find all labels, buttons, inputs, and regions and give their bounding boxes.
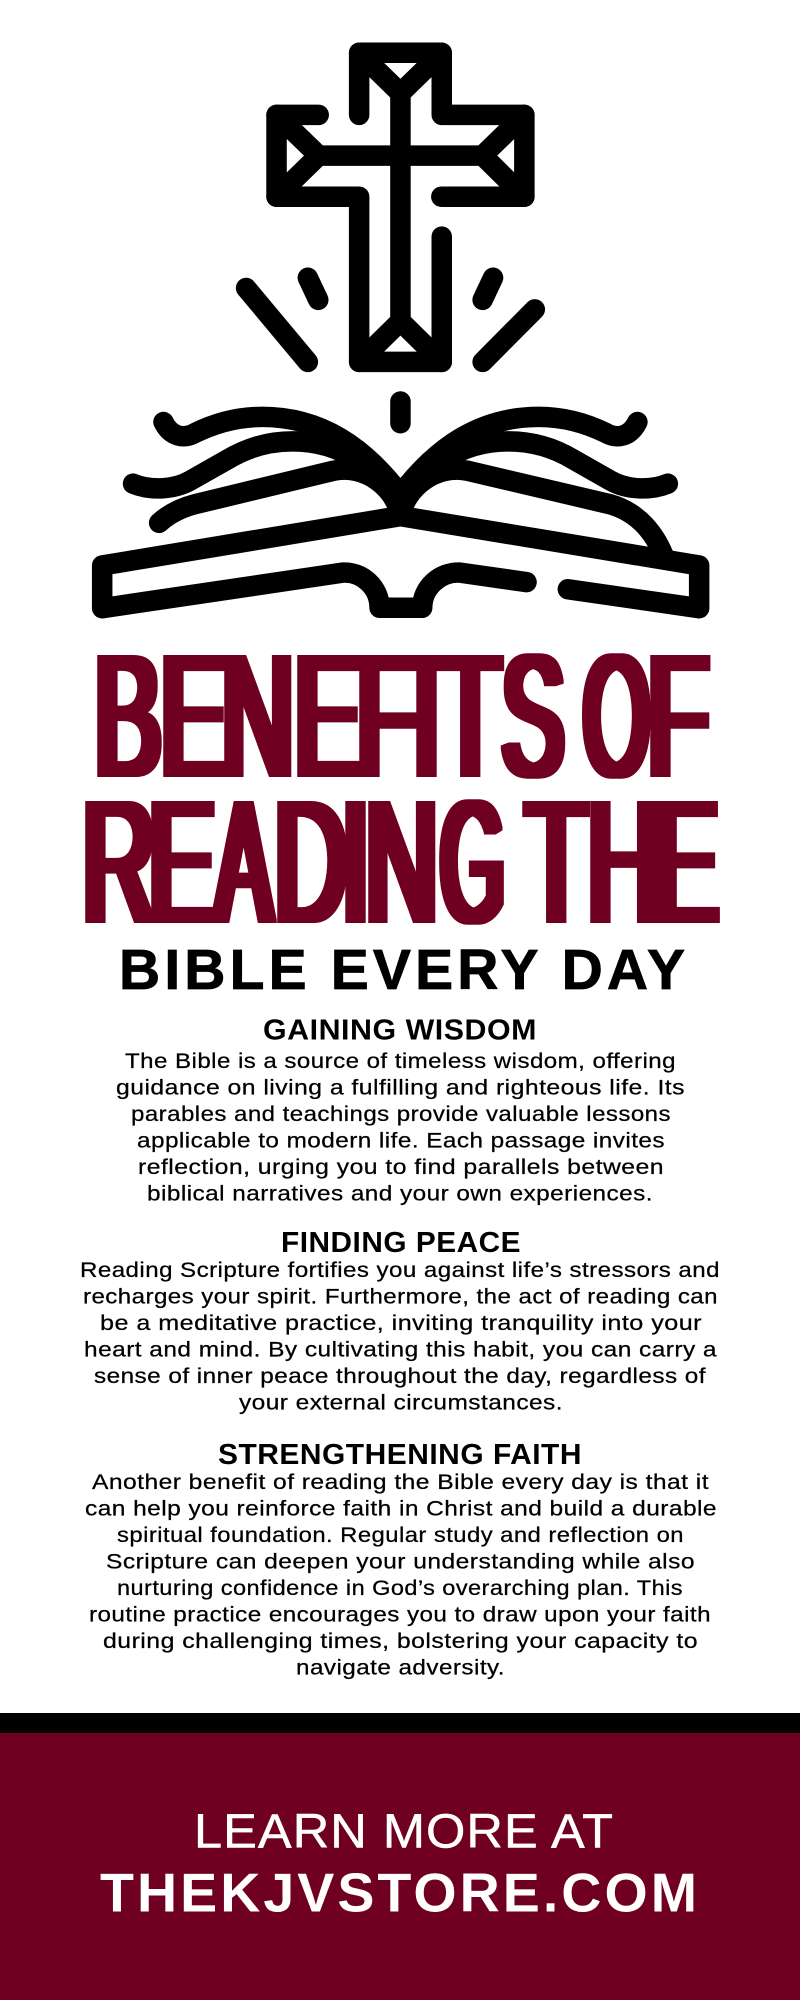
text block: finding peace body: your external circumstances. (239, 1390, 563, 1414)
heading: gaining wisdom: GAINING WISDOM (263, 1014, 537, 1046)
title: Benefits of Reading the: S (502, 618, 564, 812)
text block: strengthening faith body: Scripture can deepen your understanding while also (106, 1550, 695, 1574)
heading: finding peace: FINDING PEACE (281, 1227, 521, 1259)
title: Benefits of Reading the (82, 618, 718, 958)
icon: cross above open book (102, 53, 699, 608)
icon: open book (102, 417, 699, 608)
text block: strengthening faith body (85, 1470, 717, 1680)
footer text: learn more at: LEARN MORE AT (194, 1804, 614, 1858)
text block: strengthening faith body: Another benefit of reading the Bible every day is that it (92, 1470, 709, 1494)
text block: gaining wisdom body: The Bible is a source of timeless wisdom, offering (125, 1049, 676, 1073)
text block: finding peace body: be a meditative practice, inviting tranquility into your (100, 1311, 702, 1335)
text block: gaining wisdom body: parables and teachings provide valuable lessons (131, 1102, 671, 1126)
title: Benefits of Reading the: D (274, 764, 347, 958)
section: finding peace (80, 1227, 720, 1414)
text block: finding peace body: sense of inner peace throughout the day, regardless of (94, 1364, 706, 1388)
title: Benefits of Reading the: E (160, 618, 228, 812)
title: Benefits of Reading the: E (294, 618, 362, 812)
black divider band (0, 1713, 800, 1733)
section: gaining wisdom (116, 1014, 685, 1206)
text block: gaining wisdom body: reflection, urging you to find parallels between (138, 1155, 664, 1179)
title: Benefits of Reading the: E (654, 764, 718, 958)
icon: light rays (246, 278, 535, 423)
title: Benefits of Reading the: I (412, 618, 440, 812)
text block: strengthening faith body: nurturing confidence in God’s overarching plan. This (117, 1576, 683, 1600)
text block: gaining wisdom body: guidance on living a fulfilling and righteous life. Its (116, 1076, 685, 1100)
title: Benefits of Reading the: T (440, 618, 501, 812)
title: Benefits of Reading the: E (148, 764, 216, 958)
footer panel (0, 1713, 800, 2000)
heading: strengthening faith: STRENGTHENING FAITH (218, 1439, 582, 1471)
text block: finding peace body: Reading Scripture fortifies you against life’s stressors and (80, 1258, 720, 1282)
title: Benefits of Reading the: G (440, 764, 504, 958)
title: Benefits of Reading the: O (584, 618, 650, 812)
title: Benefits of Reading the: F (648, 618, 709, 812)
text block: strengthening faith body: navigate adversity. (296, 1656, 505, 1680)
text block: finding peace body (80, 1258, 720, 1414)
maroon footer background (0, 1733, 800, 2000)
title: Benefits of Reading the: A (216, 764, 272, 958)
text block: strengthening faith body: can help you reinforce faith in Christ and build a durable (85, 1496, 717, 1520)
subtitle: Bible Every Day: BIBLE EVERY DAY (119, 938, 685, 1002)
text block: finding peace body: heart and mind. By cultivating this habit, you can carry a (84, 1338, 717, 1362)
text block: gaining wisdom body: applicable to modern life. Each passage invites (137, 1128, 665, 1152)
text block: strengthening faith body: routine practice encourages you to draw upon your faith (89, 1602, 711, 1626)
title: Benefits of Reading the: N (366, 764, 438, 958)
title: Benefits of Reading the: N (222, 618, 294, 812)
text block: finding peace body: recharges your spirit. Furthermore, the act of reading can (83, 1284, 718, 1308)
text block: gaining wisdom body (116, 1049, 685, 1206)
title: Benefits of Reading the: I (342, 764, 370, 958)
title: Benefits of Reading the: B (94, 618, 162, 812)
text block: strengthening faith body: during challenging times, bolstering your capacity to (103, 1629, 698, 1653)
title: Benefits of Reading the: F (356, 618, 418, 812)
text block: strengthening faith body: spiritual foundation. Regular study and reflection on (117, 1523, 684, 1547)
text block: gaining wisdom body: biblical narratives and your own experiences. (147, 1182, 653, 1206)
title: Benefits of Reading the: T (526, 764, 587, 958)
title: Benefits of Reading the: R (82, 764, 155, 958)
title: Benefits of Reading the: H (588, 764, 660, 958)
section: strengthening faith (85, 1439, 717, 1680)
icon: cross (277, 53, 524, 362)
footer text: website: THEKJVSTORE.COM (100, 1862, 700, 1924)
